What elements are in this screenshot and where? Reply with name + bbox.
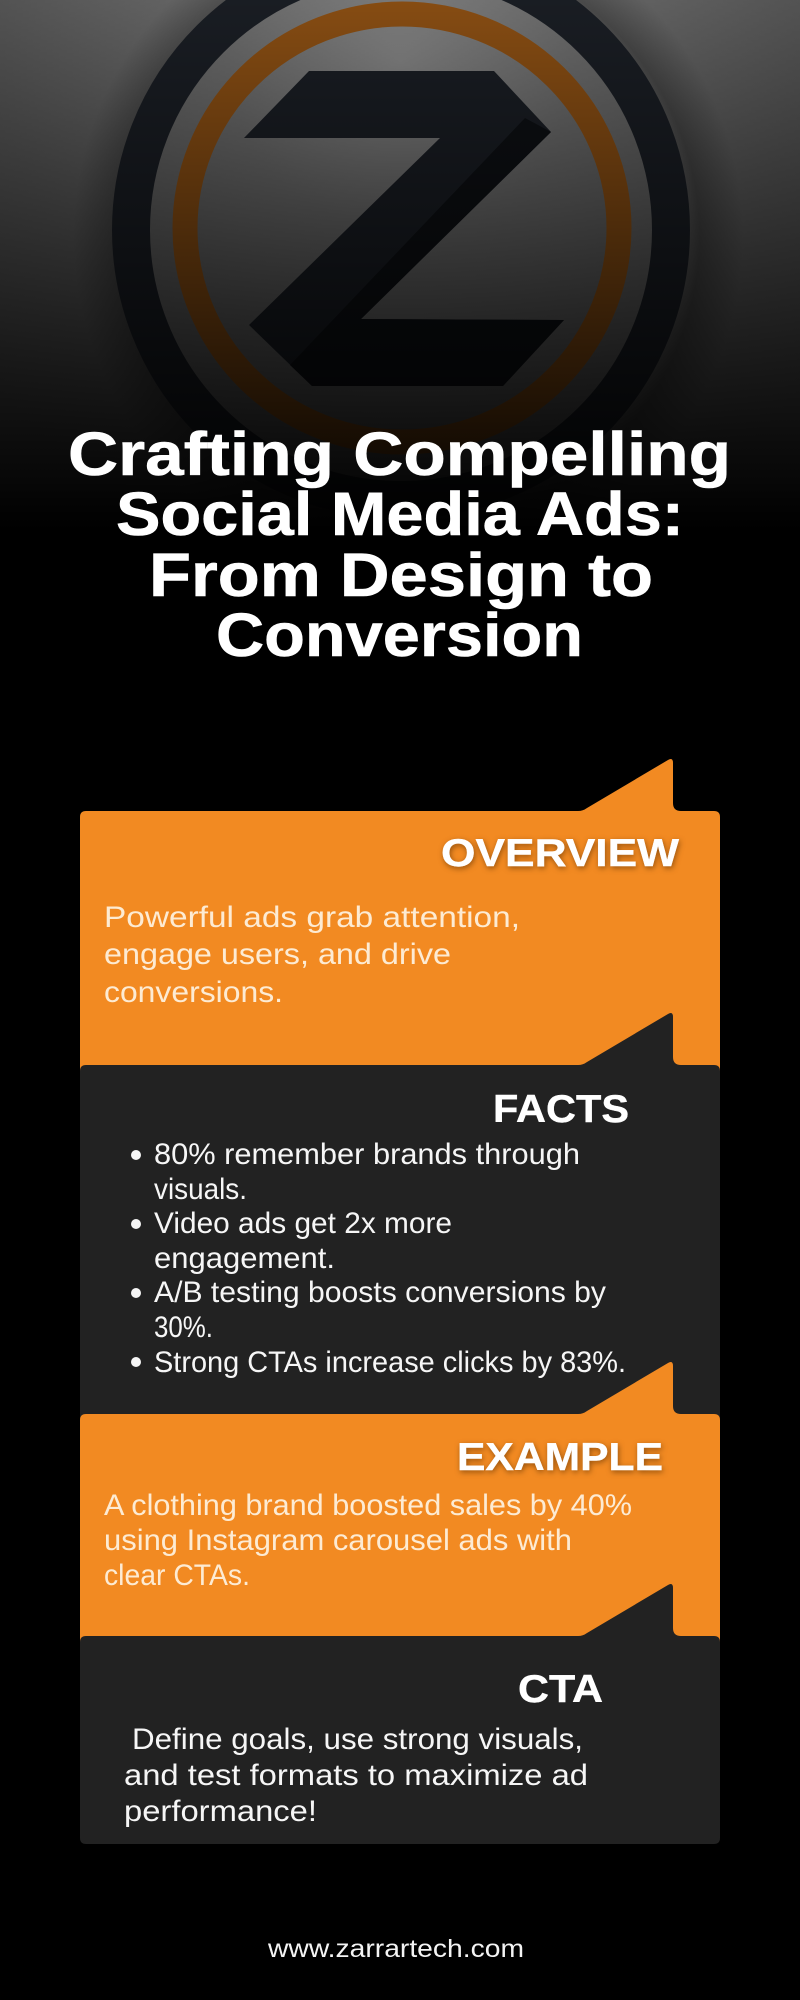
heading: example: EXAMPLE (457, 1436, 663, 1479)
footer: website: www.zarrartech.com (267, 1935, 524, 1963)
text block: example (104, 1489, 632, 1592)
list: facts: visuals. (154, 1173, 247, 1206)
list: facts: Strong CTAs increase clicks by 83%. (154, 1346, 626, 1379)
heading: facts: FACTS (493, 1088, 629, 1131)
list: facts: 80% remember brands through (154, 1138, 580, 1171)
panel: example (80, 1362, 720, 1660)
title (68, 420, 731, 669)
text block: cta: and test formats to maximize ad (124, 1759, 588, 1792)
heading: overview: OVERVIEW (441, 832, 679, 875)
icon: Z letter (244, 71, 564, 386)
text block: overview: conversions. (104, 976, 283, 1009)
heading: cta: CTA (518, 1668, 603, 1711)
text block: overview: Powerful ads grab attention, (104, 901, 520, 934)
list: facts (131, 1138, 626, 1379)
text block: overview (104, 901, 520, 1009)
text block: example: using Instagram carousel ads with (104, 1524, 572, 1557)
panel: cta (80, 1584, 720, 1844)
text block: cta: Define goals, use strong visuals, (132, 1723, 583, 1756)
text block: cta: performance! (124, 1795, 317, 1828)
text block: cta (124, 1723, 588, 1828)
text block: example: clear CTAs. (104, 1559, 250, 1592)
text block: example: A clothing brand boosted sales by 40% (104, 1489, 632, 1522)
hero image: Z logo (0, 0, 800, 571)
list: facts: Video ads get 2x more (154, 1207, 452, 1240)
list: facts: engagement. (154, 1242, 335, 1275)
title: From Design to (149, 541, 653, 609)
text block: overview: engage users, and drive (104, 938, 451, 971)
icon: orange ring (185, 14, 619, 442)
title: Crafting Compelling (68, 420, 731, 488)
panel: facts (80, 1013, 720, 1440)
icon: outer dark ring (131, 0, 671, 500)
title: Social Media Ads: (116, 480, 684, 548)
list: facts: 30%. (154, 1311, 213, 1344)
list: facts: A/B testing boosts conversions by (154, 1276, 606, 1309)
panel: overview (80, 759, 720, 1090)
title: Conversion (216, 601, 583, 669)
